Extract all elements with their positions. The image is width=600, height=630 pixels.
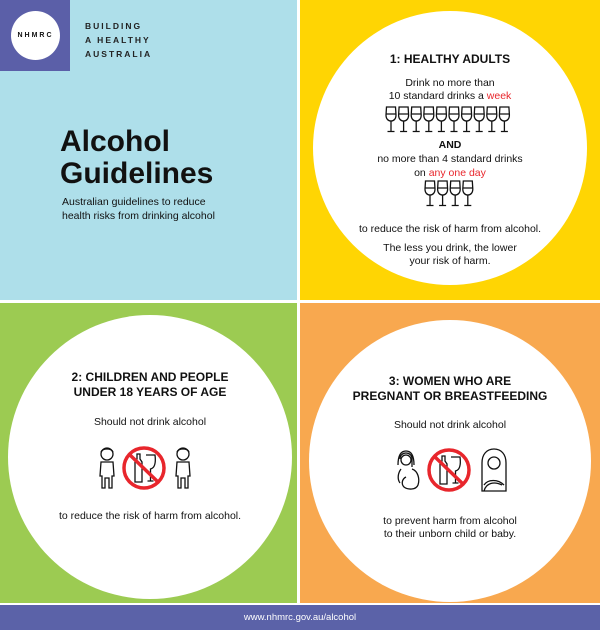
closing text: to reduce the risk of harm from alcohol. — [359, 223, 541, 235]
subtitle: Australian guidelines to reduce — [62, 196, 206, 208]
daily limit text: no more than 4 standard drinks — [377, 153, 523, 165]
title: Guidelines — [60, 157, 213, 190]
subtitle — [62, 196, 215, 222]
icon: 10 glasses — [385, 106, 510, 132]
tagline — [85, 21, 152, 59]
panel: pregnant — [300, 303, 600, 603]
closing: to prevent harm from alcohol — [383, 515, 517, 527]
icons: women and no alcohol — [397, 448, 507, 492]
logo block — [0, 0, 70, 71]
panel: intro — [0, 0, 297, 300]
logo block: NHMRC — [17, 32, 54, 39]
text: Should not drink alcohol — [394, 419, 506, 431]
heading: 1: HEALTHY ADULTS — [390, 52, 510, 66]
weekly limit text: 10 standard drinks a week — [389, 90, 511, 102]
weekly limit text — [389, 77, 512, 102]
daily limit text: on any one day — [414, 167, 486, 179]
title: Alcohol — [60, 125, 170, 158]
heading: PREGNANT OR BREASTFEEDING — [353, 389, 547, 403]
heading: UNDER 18 YEARS OF AGE — [74, 385, 226, 399]
subtitle: health risks from drinking alcohol — [62, 210, 215, 222]
footer: www.nhmrc.gov.au/alcohol — [244, 612, 356, 623]
heading: 2: CHILDREN AND PEOPLE — [72, 370, 228, 384]
closing: to reduce the risk of harm from alcohol. — [59, 510, 241, 522]
panel: healthy adults — [300, 0, 600, 300]
daily limit text — [377, 139, 523, 179]
tagline: A HEALTHY — [85, 35, 151, 45]
tagline: BUILDING — [85, 21, 142, 31]
icons: kids and no alcohol — [99, 446, 191, 490]
heading — [353, 374, 547, 403]
title — [60, 125, 213, 190]
closing: to their unborn child or baby. — [384, 528, 516, 540]
weekly limit text: Drink no more than — [405, 77, 495, 89]
panel: children — [0, 303, 297, 603]
panel: healthy adults: your risk of harm. — [409, 255, 491, 267]
text: Should not drink alcohol — [94, 416, 206, 428]
daily limit text: AND — [439, 139, 461, 151]
heading: 3: WOMEN WHO ARE — [389, 374, 511, 388]
footer — [0, 605, 600, 630]
tagline: AUSTRALIA — [85, 49, 152, 59]
heading — [72, 370, 228, 399]
icon: 4 glasses — [424, 180, 474, 206]
closing — [383, 515, 517, 540]
panel: healthy adults: The less you drink, the lower — [383, 242, 517, 254]
